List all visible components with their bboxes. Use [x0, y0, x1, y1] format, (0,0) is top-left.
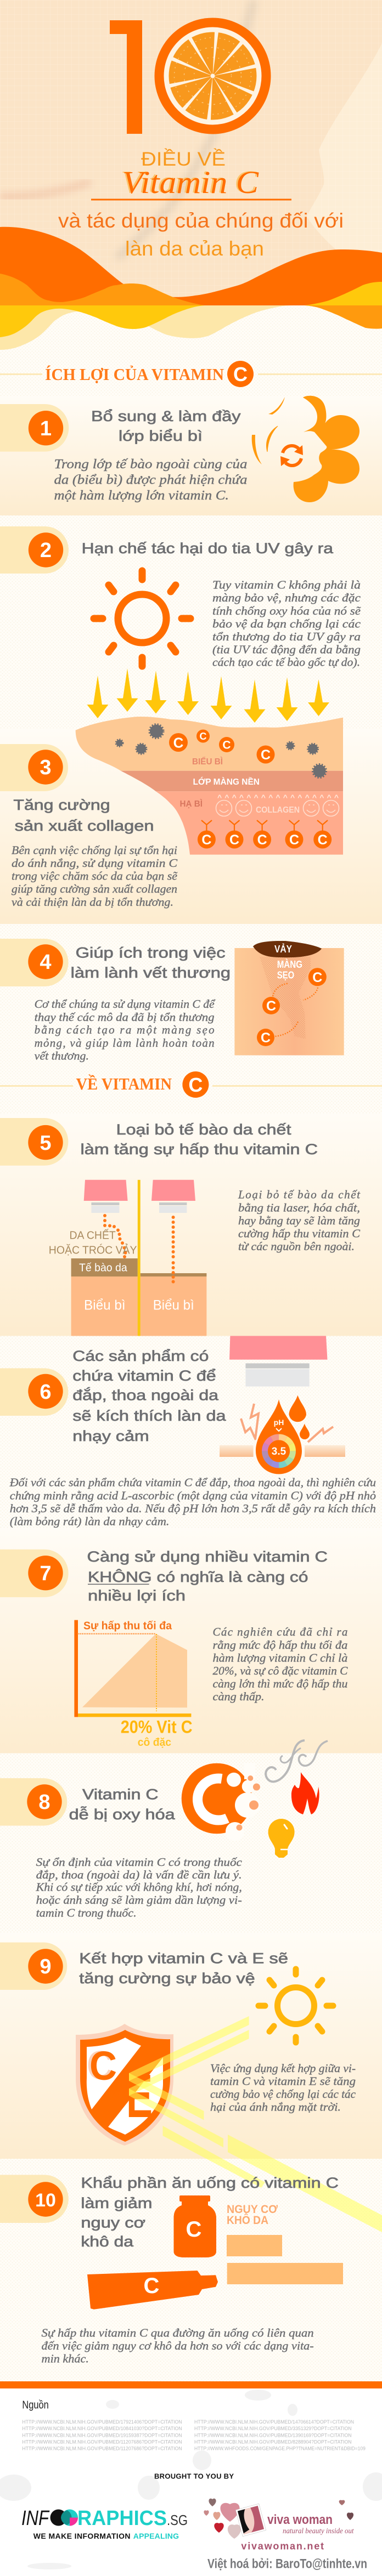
- icon: eroding vitamin C: [182, 1763, 260, 1841]
- heading 8: dễ bị oxy hóa: [69, 1806, 176, 1823]
- text block 4: vết thương.: [35, 1049, 89, 1063]
- heading 10: nguy cơ: [81, 2215, 145, 2231]
- text block 2: tính chống oxy hóa của nó sẽ: [212, 604, 361, 617]
- number badge 1: [0, 404, 69, 452]
- skin diagram: C: [257, 832, 267, 848]
- text block 1: [54, 457, 247, 503]
- text block 8: Sự ổn định của vitamin C có trong thuốc: [36, 1856, 243, 1869]
- icon: tube: [87, 2271, 218, 2310]
- logo: infographics.sg: [21, 2507, 188, 2540]
- text block 6: Đối với các sản phẩm chứa vitamin C để đắp, thoa ngoài da, thì nghiên cứu: [9, 1476, 376, 1489]
- heading 4: [71, 944, 231, 981]
- wound diagram: MÀNG: [277, 958, 302, 970]
- text block 7: rằng mức độ hấp thu tối đa: [213, 1638, 347, 1652]
- sources: HTTP://WWW.NCBI.NLM.NIH.GOV/PUBMED/1390169?DOPT=CITATION: [194, 2432, 352, 2438]
- text block 1: một hàm lượng lớn vitamin C.: [54, 489, 229, 503]
- skin diagram: C: [229, 832, 239, 848]
- title: 10 things about vitamin C: và tác dụng của chúng đối với: [58, 209, 344, 232]
- exfoliation diagram: DA CHẾT: [69, 1229, 116, 1242]
- text block 6: (làm bỏng rát) làn da nhạy cảm.: [10, 1514, 170, 1528]
- heading 7: nhiều lợi ích: [88, 1587, 186, 1604]
- panel: item 9: [0, 1942, 382, 2232]
- icon: shield C and E: [76, 2024, 173, 2146]
- skin diagram: C: [222, 739, 231, 751]
- text block 4: bằng cách tạo ra một màng sẹo: [35, 1023, 215, 1036]
- title: 10 things about vitamin C: Vitamin C: [122, 164, 259, 200]
- heading 3: sản xuất collagen: [15, 818, 154, 834]
- text block 5: Loại bỏ tế bào da chết: [238, 1188, 361, 1201]
- vitamin C molecules: [169, 729, 332, 849]
- icon: flower face: [252, 396, 359, 502]
- chart: absorption vs concentration: Sự hấp thu tối đa: [83, 1620, 172, 1632]
- light beams: [129, 2016, 382, 2232]
- text block 7: càng thấp.: [213, 1690, 265, 1703]
- sources: [22, 2399, 366, 2452]
- exfoliation diagram: Biểu bì: [153, 1298, 194, 1313]
- text block 3: [12, 843, 178, 909]
- smiley collagen: [216, 801, 339, 816]
- logo: infographics.sg: WE MAKE INFORMATION: [33, 2532, 130, 2540]
- text block 2: tổn thương do tia UV gây ra: [212, 630, 361, 643]
- bar chart: dryness risk: KHÔ DA: [227, 2214, 268, 2227]
- text block 9: tamin C và vitamin E sẽ tăng: [210, 2075, 356, 2088]
- number badge 10: 10: [35, 2190, 56, 2211]
- sources: HTTP://WWW.NCBI.NLM.NIH.GOV/PUBMED/14706614?DOPT=CITATION: [194, 2419, 354, 2425]
- panel: item 3: [0, 744, 178, 909]
- heading 10: làm giảm: [81, 2195, 152, 2211]
- icon: pH drop on skin: [220, 1395, 345, 1477]
- icon: serum dropper: [229, 1336, 327, 1387]
- exfoliation diagram: HOẶC TRÓC VẢY: [49, 1244, 137, 1256]
- footer: [0, 2381, 382, 2576]
- text block 5: [238, 1188, 361, 1253]
- number badge 3: [0, 744, 68, 791]
- heading 6: [72, 1348, 227, 1444]
- number badge 7: [0, 1550, 69, 1597]
- number badge 4: 4: [40, 951, 52, 974]
- number badge 10: [0, 2175, 69, 2223]
- text block 6: [9, 1476, 376, 1528]
- text block 4: thay thế các mô da đã bị tổn thương: [35, 1011, 215, 1024]
- skin diagram: C: [173, 735, 184, 751]
- heading 6: chứa vitamin C để: [72, 1368, 216, 1384]
- heading 6: nhạy cảm: [72, 1428, 149, 1444]
- icon: light bulb: [268, 1819, 295, 1858]
- title: 10 things about vitamin C: Vitamin C: [121, 164, 257, 200]
- text block 2: (tia UV tác động đến da bằng: [212, 643, 361, 656]
- skin diagram: ^^^^^^^^^^^^^^^^^: [217, 793, 339, 802]
- section heading: benefits: C: [233, 363, 248, 385]
- skin diagram: COLLAGEN: [256, 805, 300, 815]
- text block 4: mỏng, và giúp làm lành hoàn toàn: [35, 1036, 215, 1049]
- bar chart: dryness risk: NGUY CƠ: [227, 2203, 278, 2216]
- text block 8: [36, 1856, 243, 1920]
- heading 8: Vitamin C: [82, 1786, 158, 1802]
- number badge 5: 5: [40, 1132, 52, 1155]
- section heading: benefits: ÍCH LỢI CỦA VITAMIN: [45, 365, 224, 384]
- number badge 8: 8: [38, 1791, 50, 1814]
- text block 8: tamin C trong thuốc.: [36, 1907, 137, 1920]
- logo: viva woman: vivawoman.net: [241, 2540, 324, 2551]
- wound diagram: C: [266, 998, 276, 1014]
- text block 2: bảo vệ da bạn chống lại các: [212, 617, 361, 630]
- icon: shield C and E: C: [89, 2043, 117, 2089]
- number badge 5: [0, 1118, 68, 1166]
- text block 2: Tuy vitamin C không phải là: [212, 578, 361, 592]
- number badge 2: [0, 526, 69, 574]
- text block 6: chứng minh rằng acid L-ascorbic (một dạng của vitamin C) với độ pH nhỏ: [10, 1489, 376, 1502]
- skin diagram: C: [318, 832, 328, 848]
- splatter background: [0, 2390, 382, 2569]
- title: 10 things about vitamin C: [58, 148, 344, 260]
- heading 9: [79, 1950, 288, 1987]
- heading 9: tăng cường sự bảo vệ: [79, 1970, 255, 1987]
- panel: item 1: [0, 396, 359, 503]
- logo: infographics.sg: .SG: [167, 2512, 188, 2528]
- number badge 3: 3: [40, 756, 52, 779]
- text block 3: Bên cạnh việc chống lại sự tổn hại: [12, 843, 177, 856]
- chart: absorption vs concentration: [74, 1620, 193, 1749]
- chart: absorption vs concentration: 20% Vit C: [121, 1717, 193, 1737]
- skin diagram: C: [201, 832, 211, 848]
- sources: HTTP://WWW.NCBI.NLM.NIH.GOV/PUBMED/17921406?DOPT=CITATION: [22, 2419, 182, 2425]
- exfoliation diagram: Tế bào da: [79, 1262, 128, 1274]
- panel: item 10: [0, 2175, 343, 2365]
- heading 4: Giúp ích trong việc: [76, 944, 226, 961]
- panel: item 5: [0, 1118, 361, 1336]
- logo: viva woman: viva woman: [267, 2512, 333, 2527]
- number badge 2: 2: [40, 539, 52, 562]
- exfoliation diagram: [49, 1180, 206, 1336]
- chart: absorption vs concentration: cô đặc: [138, 1737, 171, 1749]
- text block 10: đến việc giảm nguy cơ khô da hơn so với các dạng vita-: [42, 2339, 314, 2352]
- number badge 6: 6: [40, 1381, 52, 1404]
- arrows: UV rays: [87, 668, 329, 723]
- text block 1: Trong lớp tế bào ngoài cùng của: [54, 457, 247, 472]
- icon: shield C and E: E: [126, 2062, 153, 2130]
- skin diagram: C: [289, 832, 299, 848]
- icon: flame: [291, 1772, 319, 1814]
- wound diagram: VẢY: [274, 943, 292, 955]
- text block 10: min khác.: [42, 2352, 89, 2365]
- wound diagram: [234, 941, 344, 1056]
- text block 9: [210, 2062, 356, 2114]
- text block 7: Các nghiên cứu đã chỉ ra: [213, 1625, 347, 1638]
- icon: pH drop on skin: 3.5: [272, 1446, 286, 1457]
- text block 4: [35, 997, 216, 1063]
- text block 8: hoặc ánh sáng sẽ làm giảm dần lượng vi-: [36, 1893, 242, 1907]
- heading 7: KHÔNG có nghĩa là càng có: [88, 1568, 308, 1585]
- text block 2: [212, 578, 361, 669]
- section heading: about vitamin C: [0, 1071, 382, 1098]
- logo: viva woman: [204, 2499, 355, 2551]
- title: 10 things about vitamin C: ĐIỀU VỀ: [141, 148, 226, 170]
- icon: bottle: C: [186, 2217, 201, 2242]
- sources: HTTP://WWW.NCBI.NLM.NIH.GOV/PUBMED/3351329?DOPT=CITATION: [194, 2426, 352, 2432]
- sources: HTTP://WWW.NCBI.NLM.NIH.GOV/PUBMED/19159387?DOPT=CITATION: [22, 2432, 182, 2438]
- icon: bottle: [173, 2195, 216, 2257]
- logo: infographics.sg: RAPHICS: [77, 2507, 167, 2530]
- text block 7: 20%, và sự cô đặc vitamin C: [213, 1664, 348, 1677]
- text block 7: [213, 1625, 348, 1703]
- bar chart: dryness risk: [227, 2203, 343, 2284]
- credit line: BROUGHT TO YOU BY: [154, 2472, 234, 2481]
- sources: HTTP://WWW.NCBI.NLM.NIH.GOV/PUBMED/8288904?DOPT=CITATION: [194, 2439, 352, 2446]
- heading 3: [13, 797, 154, 834]
- section heading: about vitamin C: C: [188, 1074, 203, 1096]
- panel: item 6: [0, 1336, 376, 1528]
- heading 10: [81, 2175, 339, 2250]
- text block 3: giúp tăng cường sản xuất collagen: [12, 882, 177, 895]
- heading 6: sẽ kích thích làn da: [72, 1408, 227, 1424]
- heading 3: Tăng cường: [13, 797, 110, 813]
- panel: item 8: [0, 1740, 328, 1920]
- logo: viva woman: natural beauty inside out: [283, 2527, 355, 2535]
- layer labels: BIỂU BÌ: [192, 757, 223, 767]
- heading 8: [69, 1786, 176, 1823]
- heading 7: Càng sử dụng nhiều vitamin C: [87, 1548, 328, 1565]
- number badge 4: [0, 939, 69, 986]
- section heading: about vitamin C: VỀ VITAMIN: [76, 1074, 172, 1093]
- text block 10: [42, 2327, 314, 2365]
- text block 9: cường bảo vệ chống lại các tác: [210, 2087, 356, 2101]
- wound diagram: C: [261, 1030, 271, 1046]
- wound diagram: SẸO: [277, 970, 294, 981]
- skin diagram: [76, 717, 343, 855]
- icon: big ten with orange slice: [110, 18, 271, 134]
- text block 3: do ánh nắng, sử dụng vitamin C: [12, 856, 178, 870]
- heading 6: Các sản phẩm có: [72, 1348, 209, 1364]
- text block 3: trong việc chăm sóc da của bạn sẽ: [12, 870, 178, 883]
- heading 5: [80, 1121, 318, 1158]
- section heading: benefits: [0, 361, 382, 387]
- text block 5: từ các nguồn bên ngoài.: [238, 1240, 355, 1253]
- text block 6: hơn 3,5 sẽ dễ thấm vào da. Nếu độ pH lớn hơn 3,5 rất dễ gây ra kích thích: [10, 1502, 376, 1515]
- skin diagram: LỚP MÀNG NỀN: [193, 776, 260, 787]
- hero header: [0, 0, 382, 350]
- panel: item 2: [0, 526, 361, 723]
- panel: item 4: [0, 939, 344, 1063]
- heading 2: Hạn chế tác hại do tia UV gây ra: [82, 540, 334, 557]
- panel: item 7: [0, 1548, 348, 1749]
- text block 7: hàm lượng vitamin C chỉ là: [213, 1651, 347, 1664]
- title: 10 things about vitamin C: làn da của bạn: [125, 237, 264, 260]
- heading 1: [91, 408, 241, 444]
- hearts: [204, 2499, 353, 2539]
- sources: HTTP://WWW.WHFOODS.COM/GENPAGE.PHP?TNAME=NUTRIENT&DBID=109: [194, 2446, 366, 2452]
- free radicals: [116, 725, 326, 778]
- number badge 9: 9: [40, 1955, 52, 1978]
- icon: sun: [94, 571, 190, 666]
- icon: pH drop on skin: pH: [274, 1418, 284, 1427]
- heading 10: khô da: [81, 2233, 134, 2250]
- wound diagram: C: [312, 970, 322, 985]
- number badge 1: 1: [40, 417, 52, 440]
- heading 6: đắp, thoa ngoài da: [72, 1387, 219, 1404]
- text block 1: da (biểu bì) được phát hiện chứa: [54, 473, 247, 487]
- logo: infographics.sg: APPEALING: [133, 2532, 179, 2540]
- heading 7: [87, 1548, 328, 1604]
- text block 3: và cải thiện làn da bị tổn thương.: [12, 895, 173, 909]
- sources: Nguồn: [22, 2399, 49, 2412]
- sources: HTTP://WWW.NCBI.NLM.NIH.GOV/PUBMED/11207686?DOPT=CITATION: [22, 2446, 182, 2452]
- number badge 8: [0, 1778, 67, 1826]
- background bands: [0, 396, 382, 2159]
- heading 5: Loại bỏ tế bào da chết: [116, 1121, 291, 1138]
- heading 4: làm lành vết thương: [71, 964, 231, 981]
- skin diagram: C: [261, 747, 271, 763]
- logo: infographics.sg: INF: [21, 2507, 49, 2530]
- icon: sun: [259, 1969, 333, 2042]
- text block 8: Khi có sự tiếp xúc với không khí, hơi nóng,: [36, 1881, 242, 1894]
- text block 8: đắp, thoa (ngoài da) là vấn đề cần lưu ý.: [36, 1868, 242, 1881]
- sources: HTTP://WWW.NCBI.NLM.NIH.GOV/PUBMED/11207686?DOPT=CITATION: [22, 2439, 182, 2446]
- icon: wind: [266, 1740, 328, 1781]
- text block 2: cách tạo các tế bào gốc tự do).: [212, 656, 360, 669]
- icon: shield C and E: C: [87, 2042, 114, 2088]
- text block 9: Việc ứng dụng kết hợp giữa vi-: [210, 2062, 356, 2075]
- number badge 7: 7: [40, 1562, 52, 1585]
- heading 1: lớp biểu bì: [119, 428, 203, 444]
- skin diagram: C: [200, 731, 206, 742]
- heading 1: Bổ sung & làm đầy: [91, 408, 241, 424]
- text block 5: cường hấp thu vitamin C: [238, 1227, 361, 1240]
- number badge 6: [0, 1368, 68, 1416]
- icon: tube: C: [144, 2274, 159, 2298]
- text block 5: bằng tia laser, hóa chất,: [238, 1201, 360, 1214]
- exfoliation diagram: Biểu bì: [84, 1298, 126, 1313]
- skin diagram: HẠ BÌ: [180, 799, 203, 809]
- text block 10: Sự hấp thu vitamin C qua đường ăn uống có liên quan: [42, 2327, 314, 2340]
- text block 4: Cơ thể chúng ta sử dụng vitamin C để: [35, 997, 216, 1011]
- text block 5: hay bằng tay sẽ làm tăng: [238, 1214, 360, 1227]
- number badge 9: [0, 1942, 67, 1990]
- text block 9: hại của ánh nắng mặt trời.: [210, 2101, 341, 2114]
- heading 5: làm tăng sự hấp thu vitamin C: [80, 1141, 318, 1158]
- heading 9: Kết hợp vitamin C và E sẽ: [79, 1950, 288, 1967]
- waves: [0, 227, 382, 350]
- heading 10: Khẩu phần ăn uống có vitamin C: [81, 2175, 339, 2191]
- text block 7: càng lớn thì mức độ hấp thu: [213, 1677, 347, 1690]
- sources: HTTP://WWW.NCBI.NLM.NIH.GOV/PUBMED/10841030?DOPT=CITATION: [22, 2426, 182, 2432]
- text block 2: màng bảo vệ, nhưng các đặc: [212, 591, 361, 604]
